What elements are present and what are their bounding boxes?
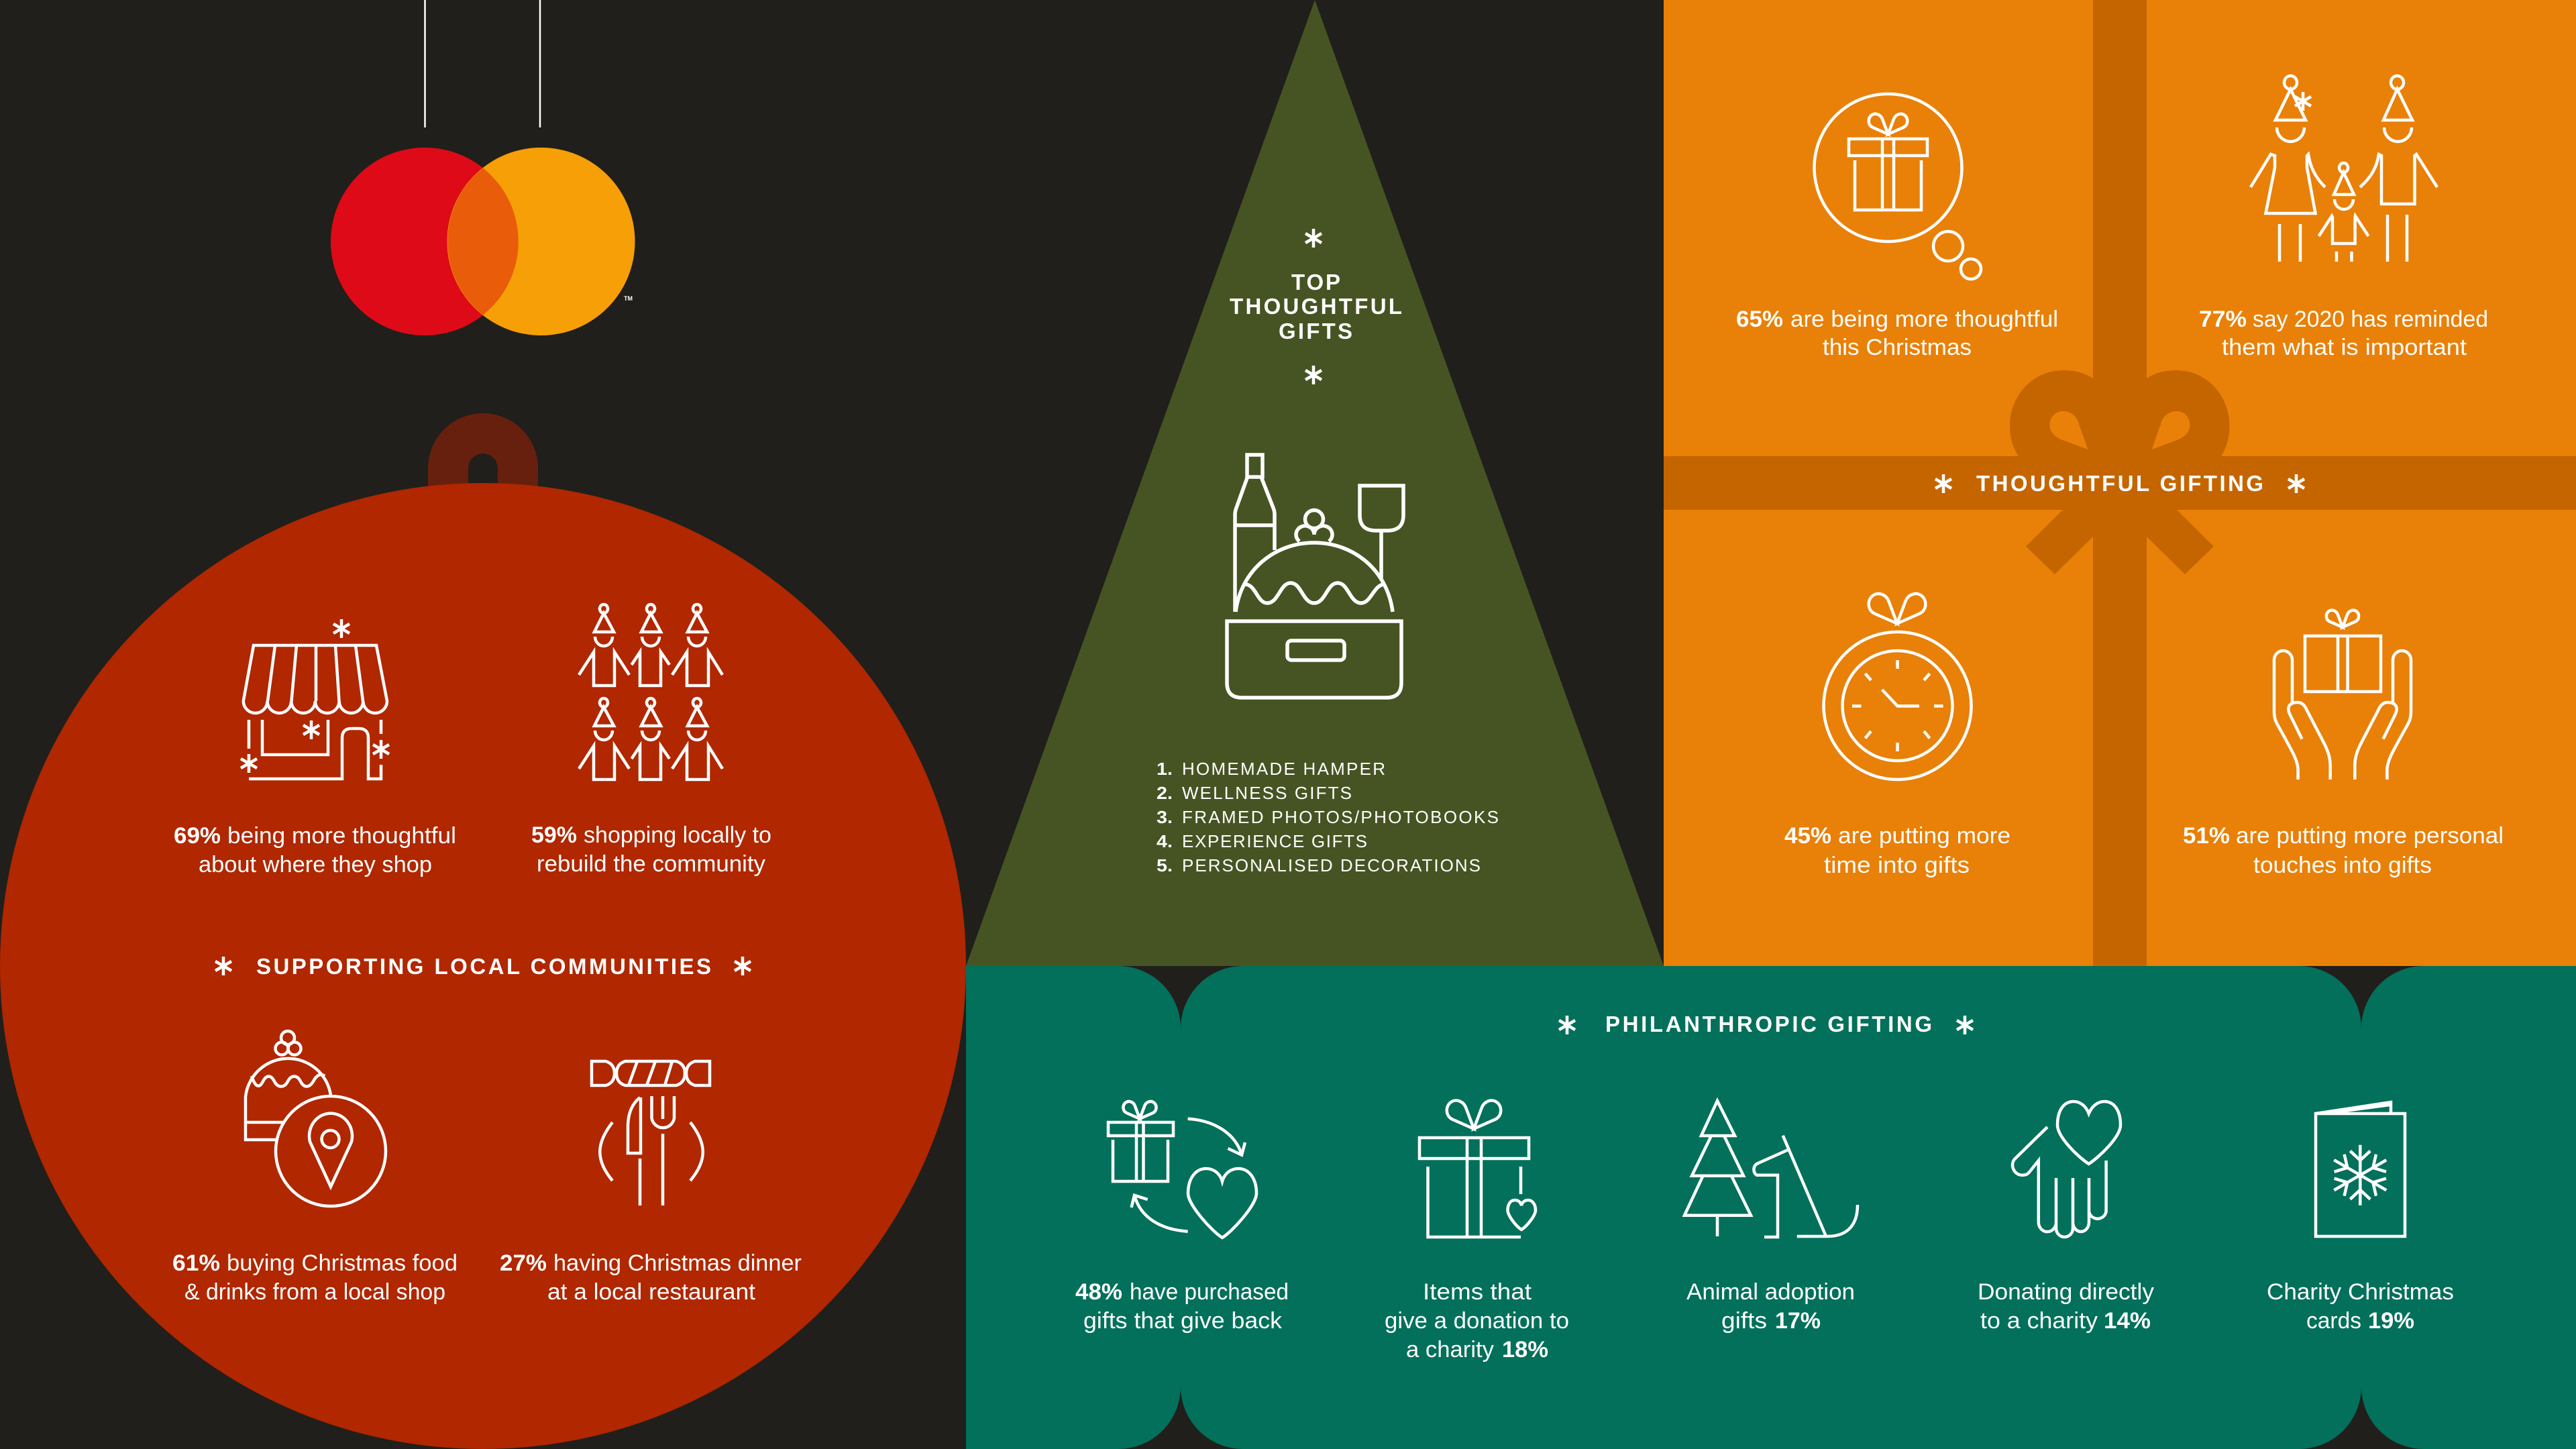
- icon: hand with heart: [2012, 1102, 2121, 1237]
- list: top five gifts: EXPERIENCE GIFTS: [1182, 831, 1367, 851]
- panel: supporting local communities bauble: [0, 413, 966, 1449]
- stat: 27% Christmas dinner at restaurant: [500, 1250, 802, 1305]
- ribbon and bow: [1664, 0, 2576, 966]
- stat: donating directly 14%: [1978, 1279, 2154, 1334]
- heading: top thoughtful gifts: TOP: [1291, 270, 1340, 294]
- stat: items that give a donation 18%: [1385, 1279, 1569, 1362]
- stat: 45% more time into gifts: 45%: [1784, 823, 1831, 849]
- panel: thoughtful gifting parcel: [1664, 0, 2576, 966]
- icon: gift in thought bubble: [1814, 94, 1981, 279]
- panel: philanthropic gifting: [966, 966, 2576, 1449]
- stat: charity Christmas cards 19%: cards: [2306, 1308, 2361, 1334]
- stat: items that give a donation 18%: give a donation to: [1385, 1308, 1569, 1334]
- heading: thoughtful gifting: THOUGHTFUL GIFTING: [1976, 471, 2263, 496]
- stat: 45% more time into gifts: [1784, 823, 2010, 878]
- stat: donating directly 14%: 14%: [2104, 1308, 2151, 1334]
- list: top five gifts: WELLNESS GIFTS: [1182, 783, 1352, 803]
- heading: supporting local communities: SUPPORTING LOCAL COMMUNITIES: [256, 954, 711, 979]
- stat: 48% gifts that give back: [1075, 1279, 1289, 1334]
- stat: 59% shopping locally: shopping locally to: [584, 822, 771, 848]
- stat: 77% reminded what is important: them what is important: [2222, 335, 2467, 360]
- stat: 27% Christmas dinner at restaurant: 27%: [500, 1250, 547, 1276]
- stat: 59% shopping locally: 59%: [531, 822, 577, 848]
- logo: hanging Mastercard circles: TM: [624, 295, 633, 302]
- heading: top thoughtful gifts: [1230, 229, 1402, 384]
- stat: 69% thoughtful about where they shop: [174, 823, 456, 877]
- stat: items that give a donation 18%: a charity: [1406, 1337, 1494, 1362]
- stat: 45% more time into gifts: are putting more: [1838, 823, 2010, 849]
- icon: hands holding gift: [2274, 610, 2411, 780]
- icon: community of people: [579, 604, 722, 780]
- stat: 45% more time into gifts: time into gifts: [1824, 853, 1970, 878]
- icon: hamper: [1227, 455, 1403, 698]
- stat: 51% more personal touches: are putting more personal: [2236, 823, 2504, 849]
- stat: donating directly 14%: to a charity: [1980, 1308, 2098, 1334]
- icon: shop front: [241, 619, 389, 779]
- stat: 27% Christmas dinner at restaurant: having Christmas dinner: [553, 1250, 802, 1276]
- icon: clock with bow: [1823, 594, 1971, 780]
- stat: animal adoption gifts 17%: gifts: [1721, 1308, 1767, 1334]
- stat: charity Christmas cards 19%: Charity Christmas: [2267, 1279, 2454, 1305]
- icon: cracker and cutlery: [592, 1061, 710, 1205]
- list: top five gifts: 2.: [1157, 783, 1173, 803]
- heading: top thoughtful gifts: GIFTS: [1279, 319, 1352, 343]
- stat: 61% Christmas food from local shop: 61%: [172, 1250, 220, 1276]
- stat: 48% gifts that give back: gifts that give back: [1083, 1308, 1283, 1334]
- logo: hanging Mastercard circles: [331, 0, 635, 335]
- stat: 69% thoughtful about where they shop: about where they shop: [199, 852, 432, 877]
- stat: 59% shopping locally: rebuild the community: [537, 851, 765, 877]
- panel: top thoughtful gifts tree: [966, 0, 1664, 966]
- list: top five gifts: 5.: [1157, 855, 1173, 875]
- stat: donating directly 14%: Donating directly: [1978, 1279, 2154, 1305]
- stat: animal adoption gifts 17%: [1686, 1279, 1855, 1334]
- heading: philanthropic gifting: PHILANTHROPIC GIFTING: [1605, 1012, 1932, 1036]
- stat: items that give a donation 18%: 18%: [1502, 1337, 1548, 1362]
- heading: top thoughtful gifts: THOUGHTFUL: [1230, 294, 1402, 319]
- list: top five gifts: [1157, 759, 1499, 875]
- list: top five gifts: 4.: [1157, 831, 1173, 851]
- list: top five gifts: 1.: [1157, 759, 1173, 779]
- stat: 51% more personal touches: [2183, 823, 2504, 878]
- icon: gift with heart tag: [1419, 1100, 1536, 1237]
- stat: 59% shopping locally: [531, 822, 771, 877]
- stat: animal adoption gifts 17%: Animal adoption: [1686, 1279, 1855, 1305]
- icon: tree and sled: [1684, 1101, 1858, 1237]
- stat: 51% more personal touches: touches into gifts: [2253, 853, 2432, 878]
- stat: 65% more thoughtful: [1736, 307, 2058, 360]
- stat: 48% gifts that give back: have purchased: [1130, 1279, 1289, 1305]
- stat: 48% gifts that give back: 48%: [1075, 1279, 1122, 1305]
- stat: 65% more thoughtful: 65%: [1736, 307, 1783, 332]
- stat: 27% Christmas dinner at restaurant: at a local restaurant: [547, 1279, 756, 1305]
- list: top five gifts: PERSONALISED DECORATIONS: [1182, 855, 1481, 875]
- stat: charity Christmas cards 19%: [2267, 1279, 2454, 1334]
- stat: items that give a donation 18%: Items that: [1423, 1279, 1532, 1305]
- stat: 61% Christmas food from local shop: [172, 1250, 458, 1305]
- stat: 65% more thoughtful: this Christmas: [1823, 335, 1972, 360]
- stat: 51% more personal touches: 51%: [2183, 823, 2230, 849]
- stat: 69% thoughtful about where they shop: being more thoughtful: [227, 823, 456, 849]
- stat: 77% reminded what is important: say 2020 has reminded: [2253, 307, 2488, 332]
- icon: gift and heart cycle: [1108, 1102, 1256, 1238]
- stat: charity Christmas cards 19%: 19%: [2368, 1308, 2414, 1334]
- list: top five gifts: HOMEMADE HAMPER: [1182, 759, 1385, 779]
- stat: 61% Christmas food from local shop: & drinks from a local shop: [184, 1279, 445, 1305]
- icon: pudding with location pin: [246, 1031, 386, 1206]
- stat: 69% thoughtful about where they shop: 69%: [174, 823, 221, 849]
- stat: 65% more thoughtful: are being more thoughtful: [1790, 307, 2058, 332]
- icon: family: [2251, 76, 2437, 262]
- stat: animal adoption gifts 17%: 17%: [1775, 1308, 1821, 1334]
- list: top five gifts: 3.: [1157, 807, 1173, 827]
- stat: 77% reminded what is important: [2199, 307, 2488, 360]
- stat: 77% reminded what is important: 77%: [2199, 307, 2247, 332]
- list: top five gifts: FRAMED PHOTOS/PHOTOBOOKS: [1182, 807, 1499, 827]
- icon: charity card with snowflake: [2316, 1102, 2405, 1236]
- stat: 61% Christmas food from local shop: buying Christmas food: [227, 1250, 458, 1276]
